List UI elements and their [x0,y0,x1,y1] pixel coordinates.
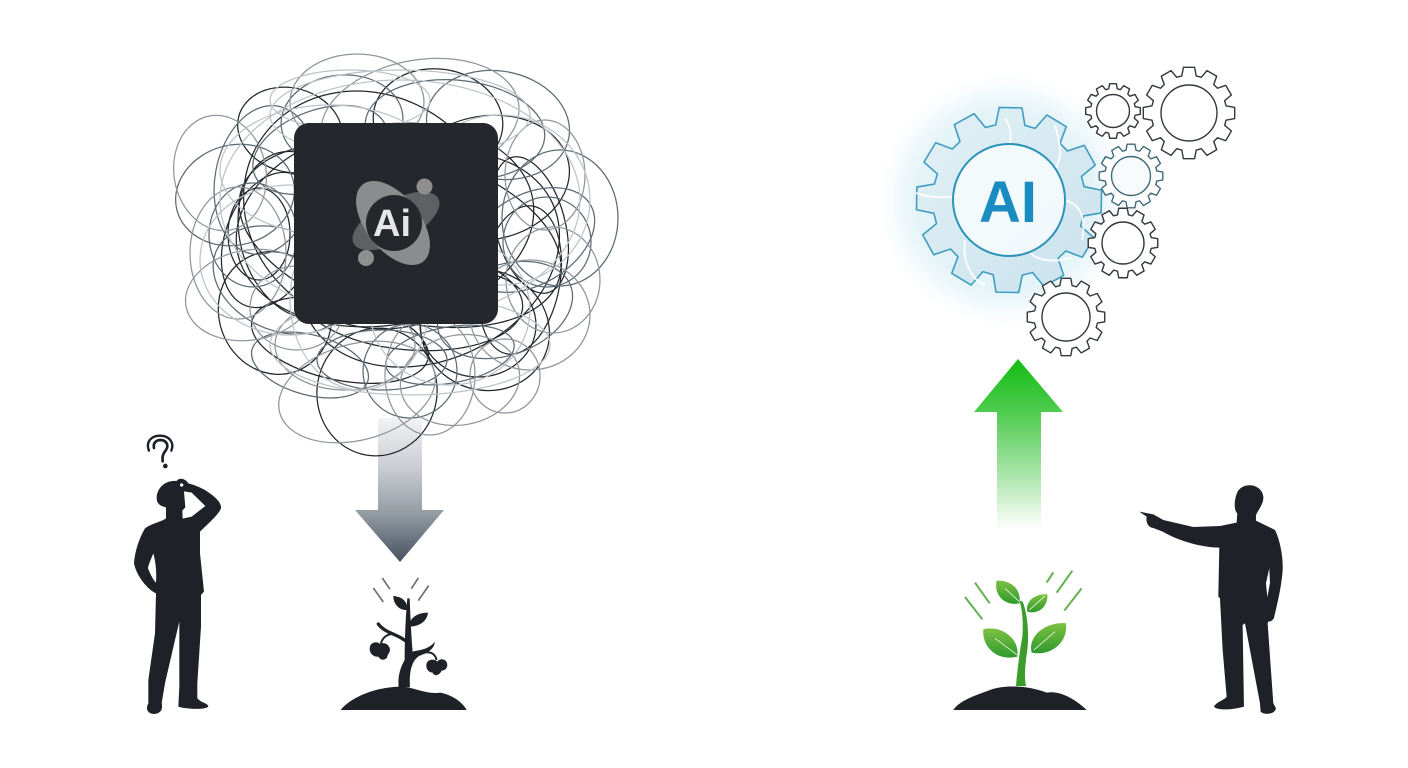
AI logo [342,168,448,278]
chip body [294,123,498,324]
silhouette: pointing person [1139,485,1283,714]
leaf veins [995,588,1055,655]
stem and branches [398,598,435,687]
wilted fruits and leaves [370,642,390,660]
gear: main AI gear [915,106,1103,294]
decline dashes [373,578,429,602]
soil mound [953,686,1087,710]
glow behind main gear [875,70,1135,330]
leaves [983,581,1066,658]
icon: question mark [148,436,172,468]
panel: left side, tangled AI [134,44,618,714]
soil mound [341,687,467,710]
AI logo: Ai [373,203,411,245]
label: AI: AI [979,170,1037,235]
gear hub [953,144,1065,256]
growth dashes [965,571,1082,619]
gear 5 [1027,278,1105,356]
panel: right side, structured AI [875,67,1283,714]
stem [1016,601,1028,686]
arrow: grey downward arrow [355,418,444,562]
tangled scribble cloud [164,44,618,465]
gear 2 [1143,67,1235,159]
icon: thriving green plant [953,571,1087,710]
arrow: green upward arrow [974,359,1063,530]
icon: wilted dark plant [341,578,467,710]
gear 4 [1088,208,1158,278]
gears: outlined cluster [1027,67,1235,356]
silhouette: confused person [134,479,221,714]
gear 3 [1099,144,1163,208]
gear 1 [1086,84,1140,138]
dark AI chip [294,123,498,324]
